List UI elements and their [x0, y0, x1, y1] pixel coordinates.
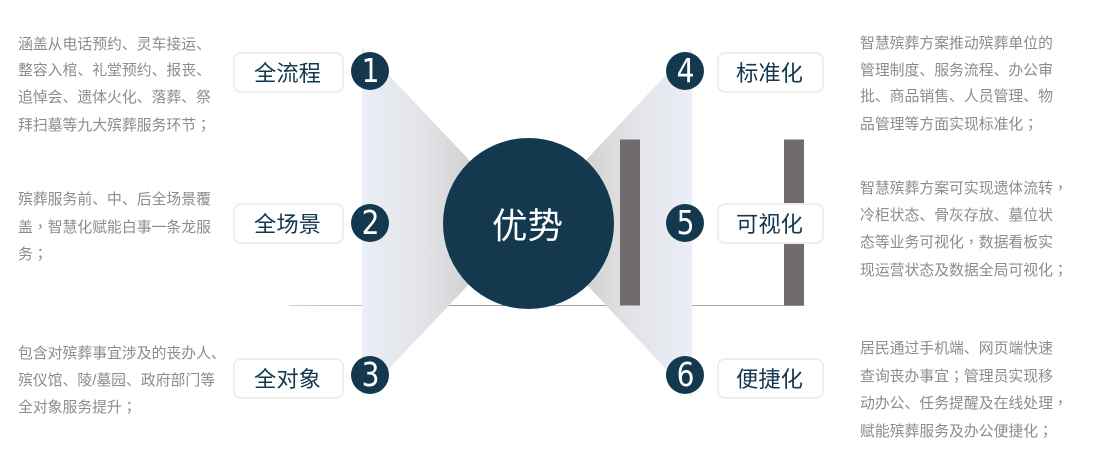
text: 可视化 description: 冷柜状态、骨灰存放、墓位状 [860, 208, 1053, 224]
text: 便捷化 description: 查询丧办事宜；管理员实现移 [860, 365, 1053, 386]
text: 便捷化 description [860, 340, 1068, 441]
text: 可视化 description: 现运营状态及数据全局可视化； [860, 259, 1068, 280]
center circle: 优势: 优势 [492, 206, 563, 246]
text: 标准化 description: 智慧殡葬方案推动殡葬单位的 [860, 36, 1053, 52]
tag: 全流程 [233, 52, 344, 93]
tag: 可视化 [717, 203, 824, 244]
tag: 便捷化 [717, 358, 824, 399]
text: 全流程 description: 追悼会、遗体火化、落葬、祭 [18, 90, 211, 106]
tag: 全对象: 全对象 [254, 367, 321, 392]
number badge 4 [666, 52, 704, 90]
text: 全对象 description: 包含对殡葬事宜涉及的丧办人、 [18, 346, 226, 362]
number badge 1: 1 [361, 51, 379, 90]
text: 全对象 description [18, 345, 226, 417]
text: 全流程 description: 涵盖从电话预约、灵车接运、 [18, 36, 211, 52]
text: 标准化 description: 品管理等方面实现标准化； [860, 113, 1038, 134]
tag: 便捷化: 便捷化 [736, 367, 803, 392]
number badge 1 [351, 52, 389, 90]
text: 全流程 description: 拜扫墓等九大殡葬服务环节； [18, 114, 211, 135]
number badge 5 [666, 204, 704, 242]
text: 便捷化 description: 赋能殡葬服务及办公便捷化； [860, 420, 1053, 441]
text: 全场景 description: 殡葬服务前、中、后全场景覆 [18, 192, 211, 208]
number badge 4: 4 [676, 51, 694, 90]
text: 全场景 description [18, 191, 211, 264]
text: 标准化 description: 管理制度、服务流程、办公审 [860, 63, 1053, 79]
text: 全流程 description [18, 36, 211, 135]
text: 便捷化 description: 动办公、任务提醒及在线处理， [860, 392, 1068, 413]
text: 可视化 description: 智慧殡葬方案可实现遗体流转， [860, 177, 1068, 198]
text: 全场景 description: 盖，智慧化赋能白事一条龙服 [18, 216, 211, 237]
tag: 全场景: 全场景 [254, 212, 321, 237]
number badge 3: 3 [361, 355, 379, 394]
tag: 全场景 [233, 203, 344, 244]
number badge 2 [351, 204, 389, 242]
text: 可视化 description [860, 177, 1068, 280]
number badge 5: 5 [676, 203, 694, 242]
text: 全对象 description: 全对象服务提升； [18, 396, 137, 417]
text: 可视化 description: 态等业务可视化，数据看板实 [860, 231, 1053, 252]
text: 全场景 description: 务； [18, 243, 48, 264]
tag: 可视化: 可视化 [736, 212, 803, 237]
number badge 6: 6 [676, 355, 694, 394]
text: 便捷化 description: 居民通过手机端、网页端快速 [860, 341, 1053, 357]
text: 标准化 description [860, 35, 1053, 134]
number badge 2: 2 [361, 203, 379, 242]
number badge 6 [666, 356, 704, 394]
tag: 全对象 [233, 358, 344, 399]
text: 标准化 description: 批、商品销售、人员管理、物 [860, 89, 1053, 105]
tag: 全流程: 全流程 [254, 61, 321, 86]
center circle: 优势 [443, 138, 614, 308]
tag: 标准化: 标准化 [736, 61, 803, 86]
tag: 标准化 [717, 52, 824, 93]
text: 全流程 description: 整容入棺、礼堂预约、报丧、 [18, 63, 211, 79]
number badge 3 [351, 356, 389, 394]
text: 全对象 description: 殡仪馆、陵/墓园、政府部门等 [18, 373, 215, 389]
